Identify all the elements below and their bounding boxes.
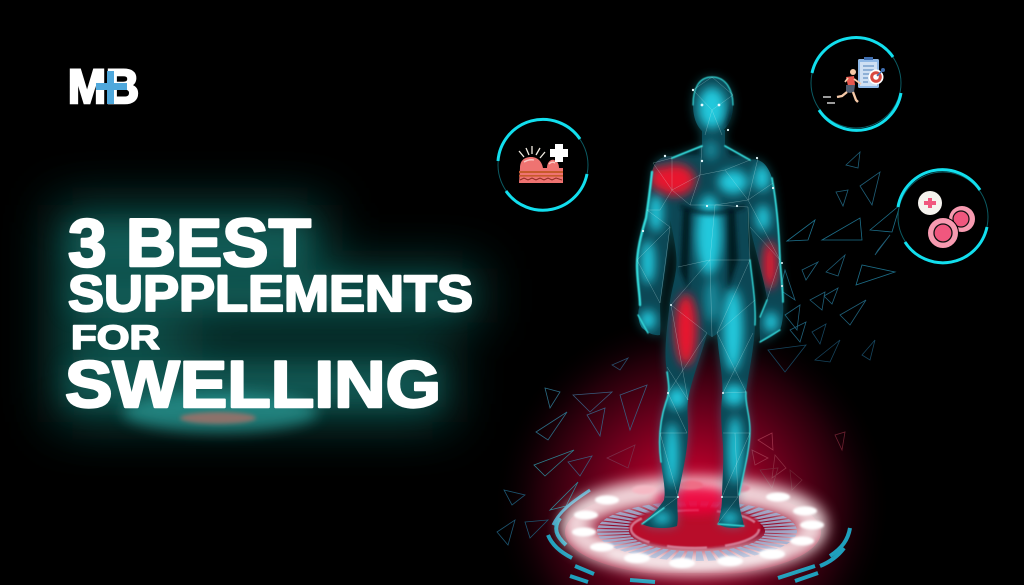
title line: SUPPLEMENTS: SUPPLEMENTS — [68, 265, 473, 322]
title — [65, 205, 473, 421]
logo: M — [68, 61, 106, 114]
figure outer glow — [637, 77, 783, 528]
icon: healing swollen tissue — [498, 119, 588, 210]
tissue bands — [519, 171, 563, 173]
white cell — [918, 191, 942, 215]
large red cell — [928, 218, 958, 248]
cross — [924, 198, 936, 208]
target — [868, 70, 884, 84]
polygon mesh — [637, 77, 780, 523]
runner — [850, 69, 856, 75]
title line: FOR: FOR — [71, 319, 160, 357]
red floor glow — [490, 310, 894, 585]
logo: B — [106, 61, 139, 114]
rays — [519, 146, 545, 158]
platform lights — [572, 480, 824, 568]
front wash over stripes — [610, 552, 785, 565]
title line: 3 BEST: 3 BEST — [68, 205, 311, 281]
mesh nodes — [642, 89, 783, 498]
figure edge highlights — [637, 77, 783, 526]
icon: blood cells — [898, 170, 988, 263]
cyan muscle highlights — [640, 87, 778, 524]
mound highlights — [524, 160, 555, 164]
clipboard — [858, 59, 879, 88]
scattered triangles — [497, 152, 900, 545]
inner red disc — [629, 506, 761, 548]
title line: SWELLING: SWELLING — [65, 347, 441, 421]
red rim — [565, 488, 821, 576]
icon ring — [898, 172, 988, 262]
small red cell — [949, 206, 975, 232]
red inflamed areas — [650, 164, 777, 366]
plus sign — [550, 144, 568, 162]
white halo — [574, 490, 814, 562]
logo — [68, 61, 139, 114]
dark shadow areas — [670, 100, 752, 290]
outer blue arcs — [548, 490, 850, 582]
icon ring — [811, 38, 901, 128]
icon ring — [498, 120, 588, 210]
icon: runner with clipboard — [811, 38, 901, 130]
inner ring — [631, 510, 759, 548]
tissue mounds — [519, 157, 563, 183]
center hot spot — [656, 486, 736, 514]
figure body — [638, 77, 784, 528]
human figure — [630, 70, 790, 540]
striped ring — [613, 506, 781, 556]
platform — [548, 480, 850, 582]
title glow — [55, 205, 480, 432]
speed lines — [823, 97, 835, 103]
